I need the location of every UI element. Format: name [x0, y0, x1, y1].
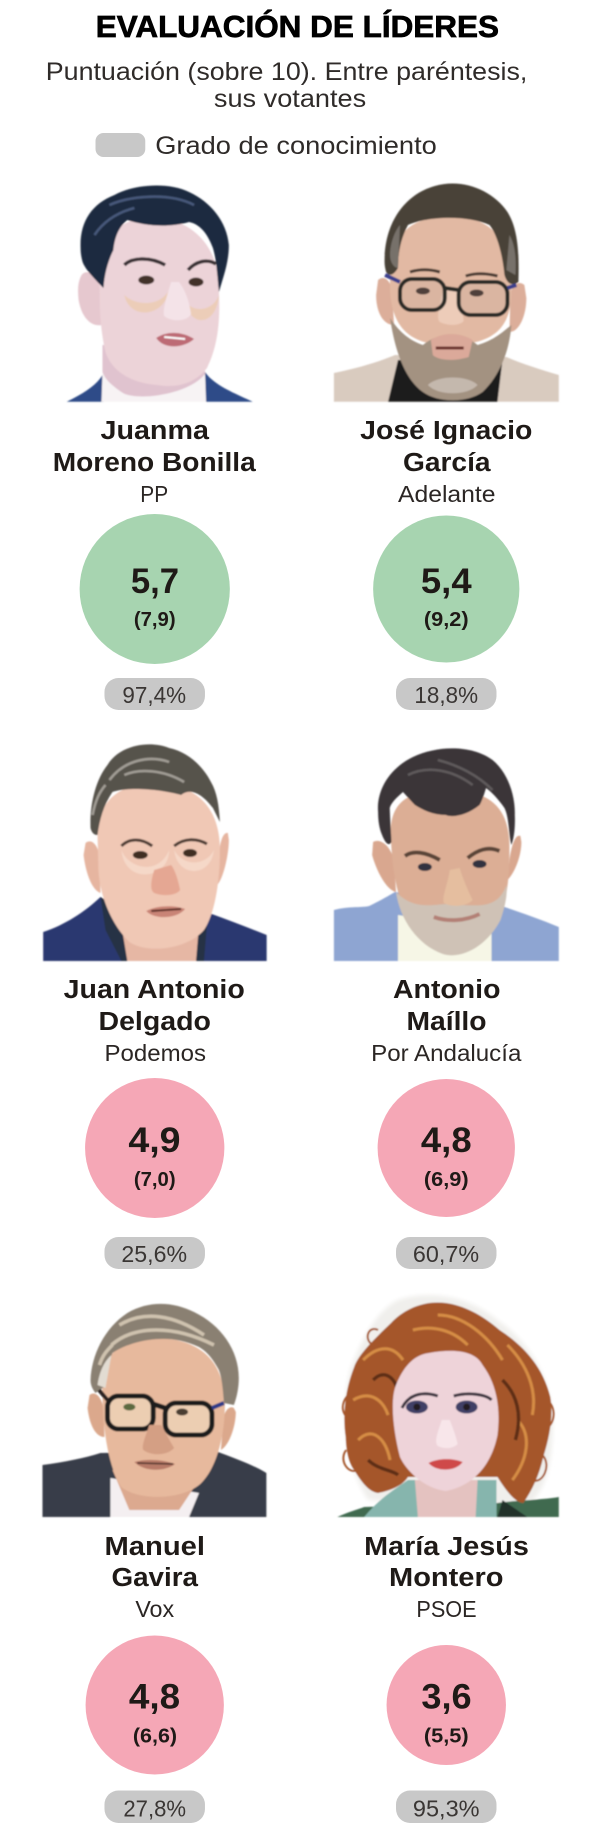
portrait: Antonio Maíllo [334, 748, 559, 961]
party: Por Andalucía [371, 1040, 522, 1066]
panel: Juan Antonio Delgado [43, 744, 267, 1269]
score circle [387, 1645, 506, 1765]
awareness pill: 25,6% [121, 1241, 187, 1267]
score circle [378, 1079, 515, 1217]
name: Juanma [100, 417, 210, 445]
score circle: (6,9) [424, 1169, 469, 1191]
portrait: Manuel Gavira [42, 1304, 266, 1517]
name: Antonio [393, 976, 500, 1004]
score circle: 4,8 [129, 1677, 180, 1717]
score circle: 4,9 [128, 1121, 181, 1160]
score circle: (6,6) [133, 1725, 177, 1748]
portrait: Moreno Bonilla [67, 186, 253, 402]
name: José Ignacio [360, 417, 532, 445]
subtitle [46, 58, 527, 113]
name [53, 417, 256, 477]
name: Montero [389, 1564, 503, 1592]
name: María Jesús [364, 1533, 529, 1561]
awareness pill: 18,8% [414, 682, 478, 708]
portrait: José Ignacio García [334, 184, 559, 402]
score circle: (9,2) [424, 609, 469, 631]
awareness pill [396, 1237, 497, 1269]
legend: grado de conocimiento: Grado de conocimiento [155, 132, 437, 160]
name [64, 976, 245, 1036]
score circle: (7,0) [134, 1169, 176, 1191]
name: Maíllo [406, 1008, 487, 1036]
name: Manuel [104, 1533, 205, 1561]
party: Adelante [398, 481, 496, 507]
party: Vox [135, 1596, 175, 1622]
score circle: 3,6 [421, 1677, 472, 1717]
portrait: Juan Antonio Delgado [43, 744, 267, 961]
party: PP [140, 481, 168, 507]
panel: Juanma Moreno Bonilla [53, 186, 256, 710]
score circle [85, 1078, 224, 1218]
name [360, 417, 532, 477]
name: Juan Antonio [64, 976, 245, 1004]
score circle: (5,5) [424, 1725, 469, 1748]
party: Podemos [104, 1040, 206, 1066]
awareness pill: 97,4% [122, 682, 186, 708]
score circle: 5,7 [131, 562, 179, 601]
awareness pill [104, 678, 205, 710]
name: Delgado [99, 1008, 211, 1036]
awareness pill [396, 1790, 497, 1823]
portrait: María Jesús Montero [337, 1295, 559, 1517]
score circle: 5,4 [421, 562, 472, 601]
title: EVALUACIÓN DE LÍDERES [96, 8, 499, 44]
awareness pill [396, 678, 497, 710]
panel: José Ignacio García [334, 184, 559, 710]
name: Moreno Bonilla [53, 449, 256, 477]
name [364, 1533, 529, 1592]
panel: Antonio Maíllo [334, 748, 559, 1269]
score circle: (7,9) [134, 609, 176, 631]
awareness pill: 60,7% [413, 1241, 479, 1267]
subtitle: Puntuación (sobre 10). Entre paréntesis, [46, 58, 527, 86]
party: PSOE [416, 1596, 477, 1622]
name [104, 1533, 205, 1592]
awareness pill [104, 1790, 205, 1823]
panel: María Jesús Montero [337, 1295, 559, 1823]
panel: Manuel Gavira [42, 1304, 266, 1823]
score circle [86, 1636, 224, 1774]
name: García [403, 449, 491, 477]
score circle: 4,8 [421, 1121, 472, 1160]
score circle [80, 514, 230, 664]
name: Gavira [111, 1564, 199, 1592]
awareness pill: 27,8% [123, 1795, 186, 1822]
name [393, 976, 500, 1036]
score circle [373, 516, 519, 662]
awareness pill [104, 1237, 205, 1269]
subtitle: sus votantes [214, 85, 366, 113]
awareness pill: 95,3% [413, 1795, 480, 1822]
